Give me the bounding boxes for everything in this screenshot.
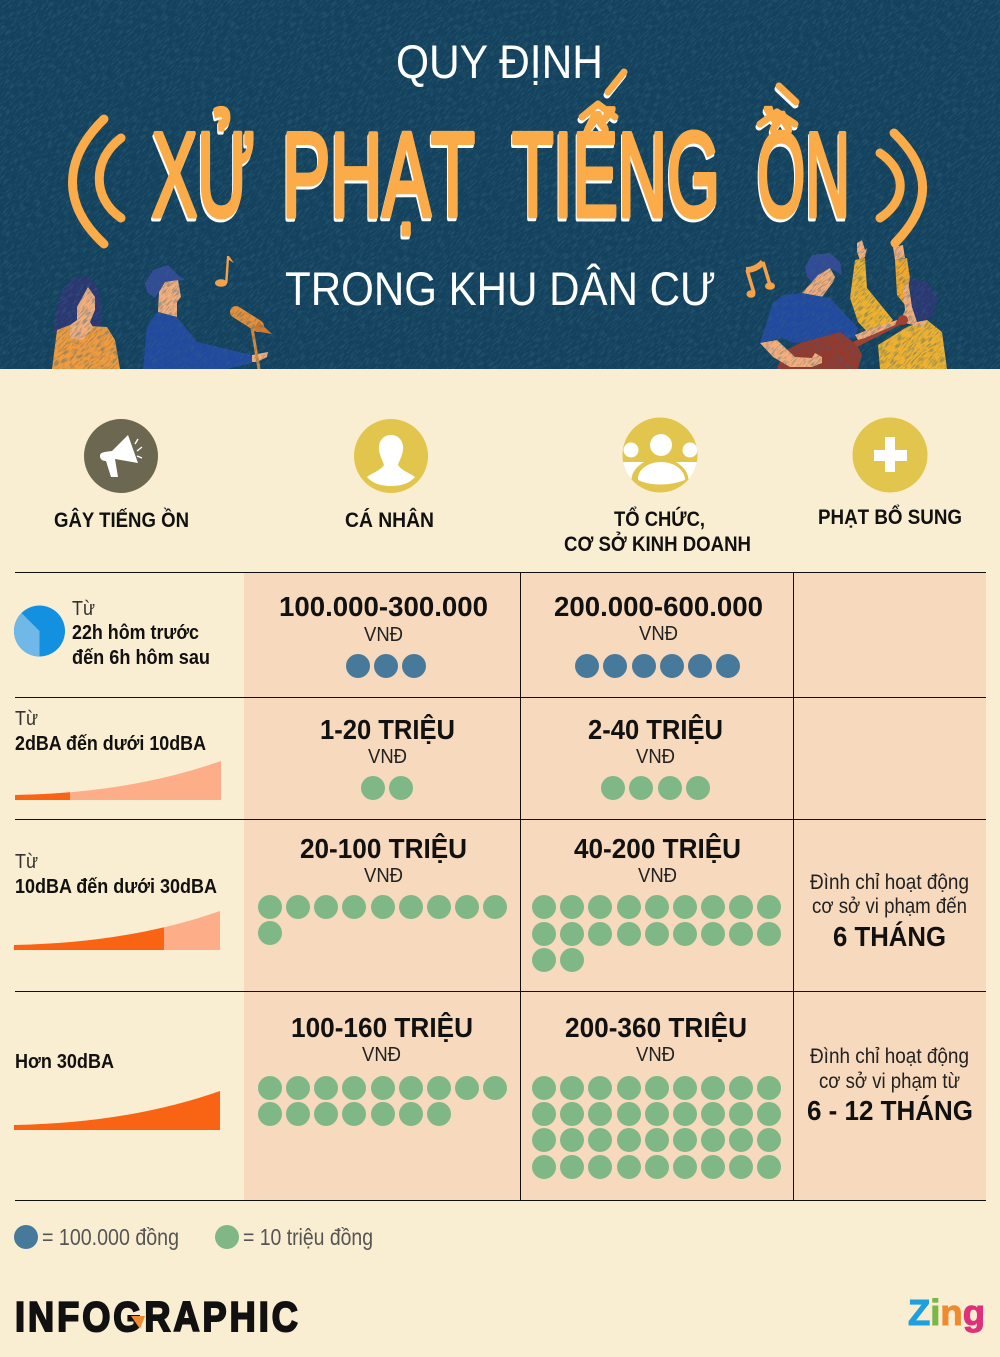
icon: person [354,419,428,493]
row label: Hơn 30dBA [15,1051,114,1073]
row label [72,598,210,669]
row label: 10dBA đến dưới 30dBA [15,876,217,898]
additional penalty: Đình chỉ hoạt động [810,871,969,894]
column header: TỔ CHỨC, CƠ SỞ KINH DOANH: CƠ SỞ KINH DOANH [564,532,751,556]
icon: clock pie [14,606,65,656]
noise level curve [14,911,220,950]
additional penalty [810,871,969,952]
individual fine: 1-20 TRIỆU [320,714,455,745]
header banner [0,0,1000,369]
icon: music note right [746,262,775,298]
illustration: singer with microphone [143,265,272,369]
organisation fine: VNĐ [639,623,678,645]
organisation fine [532,1012,781,1179]
column header: TỔ CHỨC, CƠ SỞ KINH DOANH: TỔ CHỨC, [614,507,705,531]
icon: music note left [215,256,234,287]
individual fine: VNĐ [362,1044,401,1066]
table panel background [244,573,986,1200]
individual fine: 100.000-300.000 [279,591,488,622]
icon: right sound waves [880,133,923,243]
main title: XỬ PHẠT TIẾNG ỒN: TIẾNG [512,108,720,242]
main title: XỬ PHẠT TIẾNG ỒN: PHẠT [282,108,475,242]
row label: Từ [15,708,38,730]
illustration: woman [52,277,120,369]
individual fine: VNĐ [364,624,403,646]
organisation fine [588,714,723,800]
legend [14,1224,373,1250]
main title: XỬ PHẠT TIẾNG ỒN: XỬ [152,107,255,242]
additional penalty [807,1045,973,1126]
title line: QUY ĐỊNH: QUY ĐỊNH [396,35,603,88]
individual fine: VNĐ [368,746,407,768]
icon: plus [852,418,928,492]
title line: TRONG KHU DÂN CƯ: TRONG KHU DÂN CƯ [285,262,716,315]
column header: GÂY TIẾNG ỒN [54,419,189,532]
logo: Zing: Zing [908,1292,985,1333]
individual fine: 20-100 TRIỆU [300,833,467,864]
column header: CÁ NHÂN: CÁ NHÂN [345,508,434,532]
row 1: night time [14,591,763,678]
column header: GÂY TIẾNG ỒN: GÂY TIẾNG ỒN [54,508,189,532]
noise level curve [14,1091,220,1130]
main title: XỬ PHẠT TIẾNG ỒN [152,72,850,242]
icon: group [622,418,700,492]
legend: = 100.000 đồng [42,1224,179,1250]
organisation fine: 2-40 TRIỆU [588,714,723,745]
column header: PHẠT BỔ SUNG [818,418,962,529]
row label: Từ [15,851,38,873]
organisation fine: 200.000-600.000 [554,591,763,622]
row label: Từ [72,598,95,620]
icon: left sound waves [72,119,121,244]
individual fine: 100-160 TRIỆU [291,1012,473,1043]
organisation fine: VNĐ [636,746,675,768]
organisation fine [532,833,781,972]
legend: = 10 triệu đồng [243,1224,373,1250]
additional penalty: 6 - 12 THÁNG [807,1095,973,1126]
row label: 2dBA đến dưới 10dBA [15,733,206,755]
noise level curve [15,761,221,800]
row 4: over 30 dBA [14,1012,973,1179]
organisation fine [554,591,763,678]
individual fine [258,833,507,945]
organisation fine: VNĐ [636,1044,675,1066]
individual fine [258,1012,507,1126]
organisation fine: 200-360 TRIỆU [565,1012,747,1043]
additional penalty: cơ sở vi phạm đến [812,895,967,918]
additional penalty: Đình chỉ hoạt động [810,1045,969,1068]
organisation fine: 40-200 TRIỆU [574,833,741,864]
column header: CÁ NHÂN [345,419,434,532]
row label: đến 6h hôm sau [72,647,210,669]
illustration: raised-arm person in yellow [850,240,947,369]
column header: PHẠT BỔ SUNG: PHẠT BỔ SUNG [818,505,962,529]
individual fine [279,591,488,678]
row label [15,851,217,898]
logo: INFOGRAPHIC: INFOGRAPHIC [15,1295,301,1341]
row label [15,708,206,755]
icon: megaphone [84,419,158,493]
additional penalty: cơ sở vi phạm từ [819,1070,960,1093]
illustration: guitarist [760,253,908,369]
organisation fine: VNĐ [638,865,677,887]
individual fine [320,714,455,800]
individual fine: VNĐ [364,865,403,887]
row 2: 2 to 10 dBA [15,708,723,800]
main title: XỬ PHẠT TIẾNG ỒN: ỒN [757,108,850,242]
row label: 22h hôm trước [72,622,199,644]
row 3: 10 to 30 dBA [14,833,969,972]
additional penalty: 6 THÁNG [833,921,946,952]
column header: TỔ CHỨC, CƠ SỞ KINH DOANH [564,418,751,556]
